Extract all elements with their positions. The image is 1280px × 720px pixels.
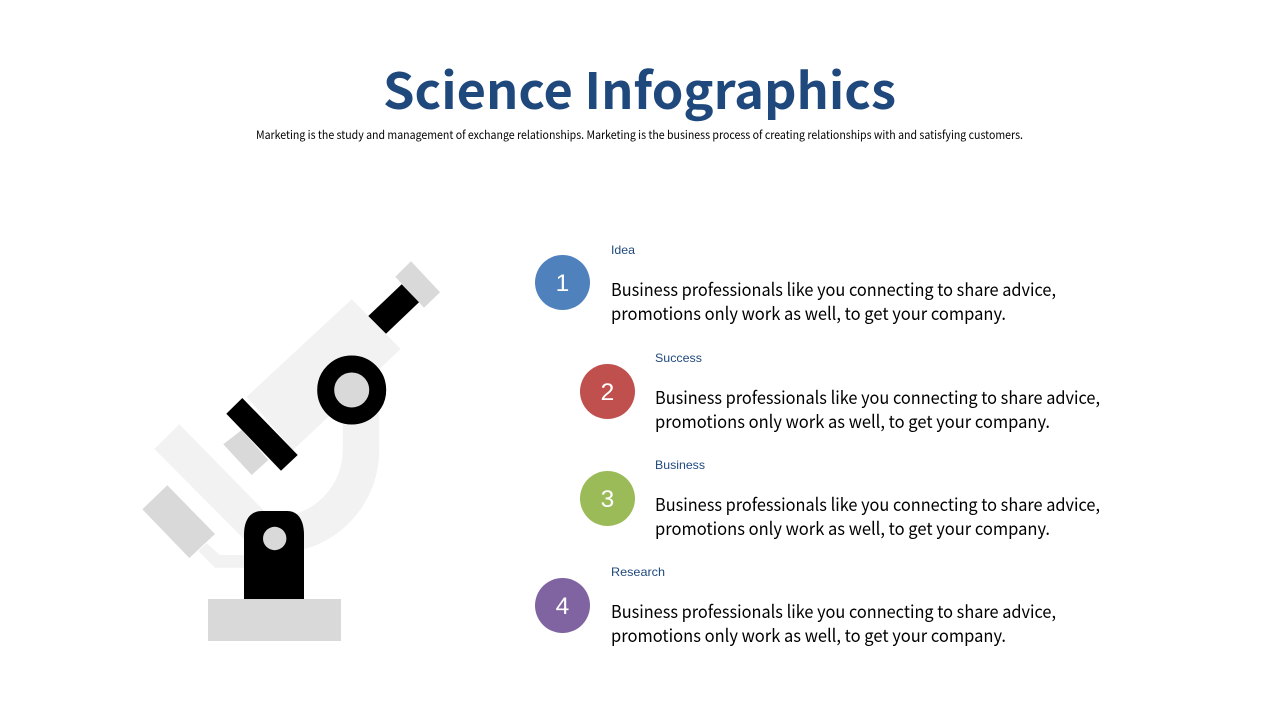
microscope foot xyxy=(198,543,250,568)
title: Science Infographics xyxy=(383,52,896,124)
description 2: Business professionals like you connecting to share advice, xyxy=(655,385,1100,410)
body tube xyxy=(247,299,401,450)
number 4: 4 xyxy=(556,593,569,620)
description 3: Business professionals like you connecting to share advice, xyxy=(655,492,1100,517)
number badge 1 xyxy=(535,255,590,310)
label idea: Idea xyxy=(611,243,635,257)
microscope arm xyxy=(276,400,361,535)
label research: Research xyxy=(611,565,665,579)
step 3: business xyxy=(580,458,1100,541)
number 3: 3 xyxy=(601,486,614,513)
pillar pivot xyxy=(263,527,286,550)
subtitle: Marketing is the study and management of exchange relationships. Marketing is the business process of creating relationships with and satisfying customers. xyxy=(256,127,1023,143)
number 2: 2 xyxy=(601,379,614,406)
description 3: promotions only work as well, to get your company. xyxy=(655,516,1050,541)
eyepiece xyxy=(368,284,419,334)
number badge 2 xyxy=(580,364,635,419)
eyepiece cap xyxy=(395,261,440,308)
objective collar xyxy=(226,398,298,471)
mirror block xyxy=(142,485,215,558)
focus knob xyxy=(326,364,378,416)
number badge 3 xyxy=(580,471,635,526)
number 1: 1 xyxy=(556,270,569,297)
microscope stage xyxy=(154,424,265,540)
step 1: idea xyxy=(535,243,1056,326)
description 1: promotions only work as well, to get your company. xyxy=(611,301,1006,326)
description 4: promotions only work as well, to get your company. xyxy=(611,623,1006,648)
pillar xyxy=(244,511,304,599)
step 2: success xyxy=(580,351,1100,434)
label business: Business xyxy=(655,458,705,472)
base xyxy=(208,599,341,641)
description 1: Business professionals like you connecting to share advice, xyxy=(611,277,1056,302)
description 4: Business professionals like you connecting to share advice, xyxy=(611,599,1056,624)
objective lens xyxy=(223,430,268,475)
description 2: promotions only work as well, to get your company. xyxy=(655,409,1050,434)
label success: Success xyxy=(655,351,702,365)
step 4: research xyxy=(535,565,1056,648)
number badge 4 xyxy=(535,578,590,633)
icon: microscope xyxy=(142,261,440,641)
